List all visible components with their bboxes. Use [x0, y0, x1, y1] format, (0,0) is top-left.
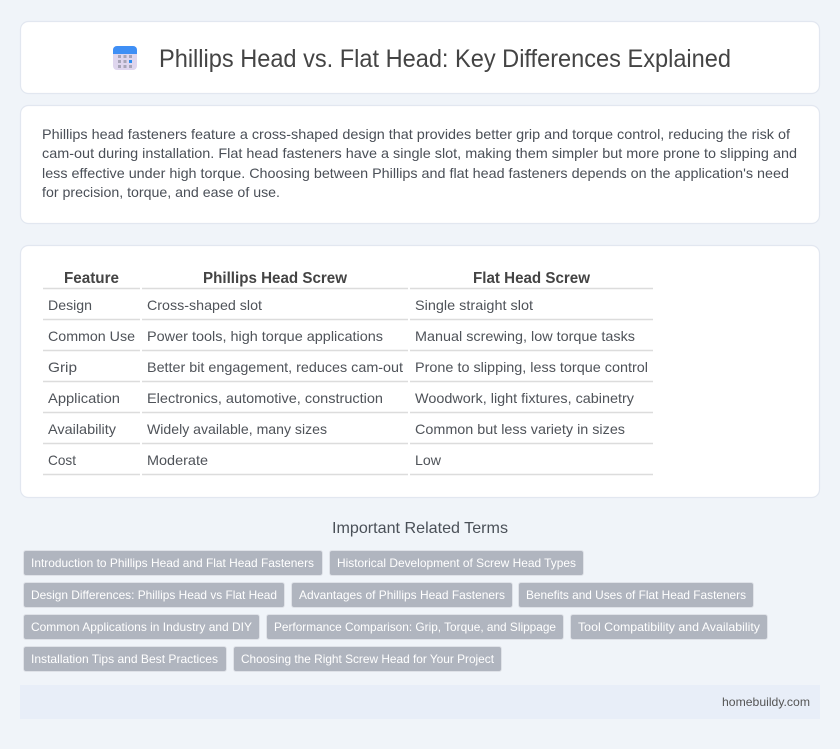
title: Phillips Head vs. Flat Head: Key Differences Explained [159, 45, 731, 73]
tag: Performance Comparison: Grip, Torque, and Slippage [274, 620, 556, 634]
tag [266, 614, 564, 640]
tag: Installation Tips and Best Practices [31, 652, 218, 666]
tag: Design Differences: Phillips Head vs Flat Head [31, 588, 277, 602]
tag [24, 550, 322, 576]
tag [24, 646, 226, 672]
panel: description [20, 106, 820, 224]
table row: availability: Common but less variety in sizes [415, 421, 625, 437]
table row: common use [43, 328, 653, 350]
table row: cost: Low [415, 452, 442, 468]
related term tags [24, 550, 768, 672]
panel: header [20, 22, 820, 94]
tag [24, 614, 260, 640]
table row: common use: Power tools, high torque applications [147, 328, 383, 344]
table row: design: Cross-shaped slot [147, 297, 262, 313]
table row: design: Single straight slot [415, 297, 533, 313]
table row: grip: Grip [48, 359, 77, 375]
tag: Choosing the Right Screw Head for Your Project [241, 652, 495, 666]
table row: common use: Common Use [48, 328, 135, 344]
tag: Advantages of Phillips Head Fasteners [299, 588, 505, 602]
table row: application [43, 390, 653, 412]
tag: Benefits and Uses of Flat Head Fasteners [526, 588, 746, 602]
table row: availability [43, 421, 653, 444]
table row: grip: Prone to slipping, less torque control [415, 359, 648, 375]
table header row: Flat Head Screw [473, 270, 591, 287]
tag [570, 614, 768, 640]
table row: application: Woodwork, light fixtures, cabinetry [415, 390, 634, 406]
text block: description: cam-out during installation. Flat head fasteners have a single slot, making them simpler but more prone to slipping and [42, 145, 797, 161]
table header row: Phillips Head Screw [203, 270, 348, 287]
table row: common use: Manual screwing, low torque tasks [415, 328, 635, 344]
table row: design: Design [48, 297, 92, 313]
table row: application: Electronics, automotive, construction [147, 390, 383, 406]
table row: application: Application [48, 390, 120, 406]
tag [518, 582, 754, 608]
tag: Historical Development of Screw Head Types [337, 556, 576, 570]
table header row [43, 270, 653, 288]
panel: comparison table [20, 246, 820, 498]
table row: grip: Better bit engagement, reduces cam-out [147, 359, 403, 375]
table row: cost: Moderate [147, 452, 208, 468]
table row: availability: Availability [48, 421, 116, 437]
text block: description [42, 126, 797, 200]
tag [24, 582, 284, 608]
table row: availability: Widely available, many sizes [147, 421, 327, 437]
tag: Common Applications in Industry and DIY [31, 620, 252, 634]
tag [234, 646, 502, 672]
tag: Tool Compatibility and Availability [578, 620, 760, 634]
text block: description: Phillips head fasteners feature a cross-shaped design that provides better grip and torque control, reducing the risk of [42, 126, 790, 142]
text block: description: less effective under high torque. Choosing between Phillips and flat head fasteners depends on the application's need [42, 165, 789, 181]
footer site name: homebuildy.com [722, 695, 810, 709]
tag [330, 550, 584, 576]
tag [292, 582, 512, 608]
heading: related terms: Important Related Terms [332, 520, 508, 537]
icon: calendar grid [113, 46, 137, 70]
text block: description: for precision, torque, and ease of use. [42, 184, 280, 200]
table row: cost: Cost [48, 452, 76, 468]
table row: cost [43, 452, 653, 474]
footer bar [20, 685, 820, 719]
table header row: Feature [64, 270, 119, 287]
tag: Introduction to Phillips Head and Flat Head Fasteners [31, 556, 314, 570]
table row: design [43, 297, 653, 320]
table row: grip [43, 359, 653, 382]
